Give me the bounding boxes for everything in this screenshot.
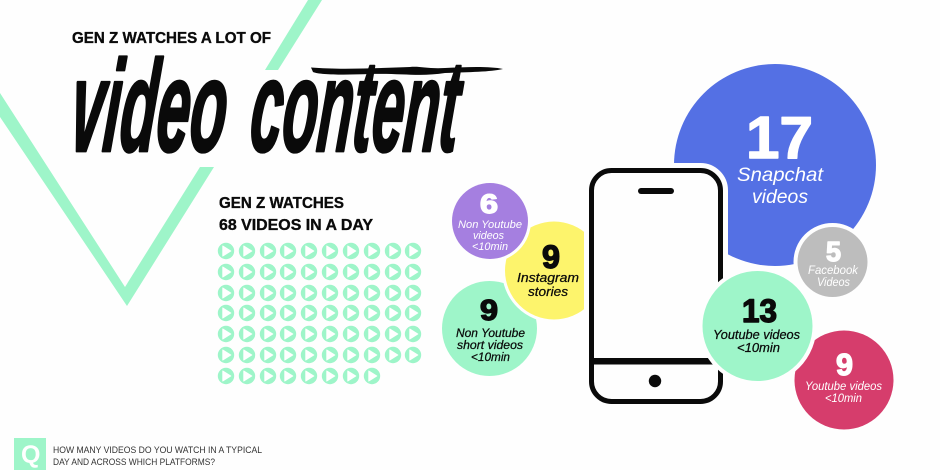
survey question text [53,445,262,468]
pictogram: 68 play icons [218,243,421,384]
bubble: youtube videos 9: 9 [836,347,853,382]
bubble: instagram stories 9: stories [528,285,568,299]
bubble: facebook videos 5 [798,227,868,297]
bubble: facebook videos 5: 5 [826,236,841,267]
bubble: snapchat 17: 17 [746,105,813,171]
title: video content: video [66,33,234,179]
subheading: 68 videos in a day: GEN Z WATCHES [219,195,344,212]
bubble: non youtube videos 6: videos [473,230,504,242]
bubble: snapchat 17 [674,64,876,266]
subheading: 68 videos in a day: 68 VIDEOS IN A DAY [219,217,374,234]
subheading: 68 videos in a day [219,195,374,234]
bubble: non youtube videos 6: 6 [480,189,498,219]
bubble: non youtube videos 6 [452,183,528,259]
survey question text: HOW MANY VIDEOS DO YOU WATCH IN A TYPICAL [53,445,262,456]
bubble: non youtube videos 6: Non Youtube [458,219,522,231]
survey question text: DAY AND ACROSS WHICH PLATFORMS? [53,457,215,468]
survey question badge [14,438,46,470]
bubble: youtube videos 13: 13 [742,293,777,329]
bubble: non youtube short videos 9 [442,281,537,376]
bubble: youtube videos 13: <10min [737,341,780,355]
bubble: youtube videos 13: Youtube videos [713,328,800,342]
bubble: snapchat 17: Snapchat [737,165,824,186]
bubble: instagram stories 9 [505,222,603,320]
bubble: youtube videos 9 [794,330,894,430]
bubble: snapchat 17: videos [752,187,809,208]
survey question badge: Q [21,441,40,469]
bubble: non youtube short videos 9: 9 [480,295,498,327]
bubble: non youtube short videos 9: <10min [471,350,510,364]
bubble: facebook videos 5: Facebook [808,265,859,277]
background chevron [0,0,322,306]
icon: smartphone [592,170,720,402]
bubble: non youtube videos 6: <10min [472,241,508,253]
bubble: instagram stories 9: 9 [542,239,560,275]
bubble: instagram stories 9: Instagram [517,271,579,285]
bubble: youtube videos 13 [702,271,812,381]
bubble: non youtube short videos 9: Non Youtube [456,326,525,340]
heading: gen z watches a lot of: GEN Z WATCHES A LOT OF [72,30,271,47]
bubble: youtube videos 9: <10min [825,393,862,405]
title: video content: content [246,33,468,179]
bubble: youtube videos 9: Youtube videos [805,381,882,393]
bubble: facebook videos 5: Videos [817,277,850,289]
bubble: non youtube short videos 9: short videos [457,338,523,352]
